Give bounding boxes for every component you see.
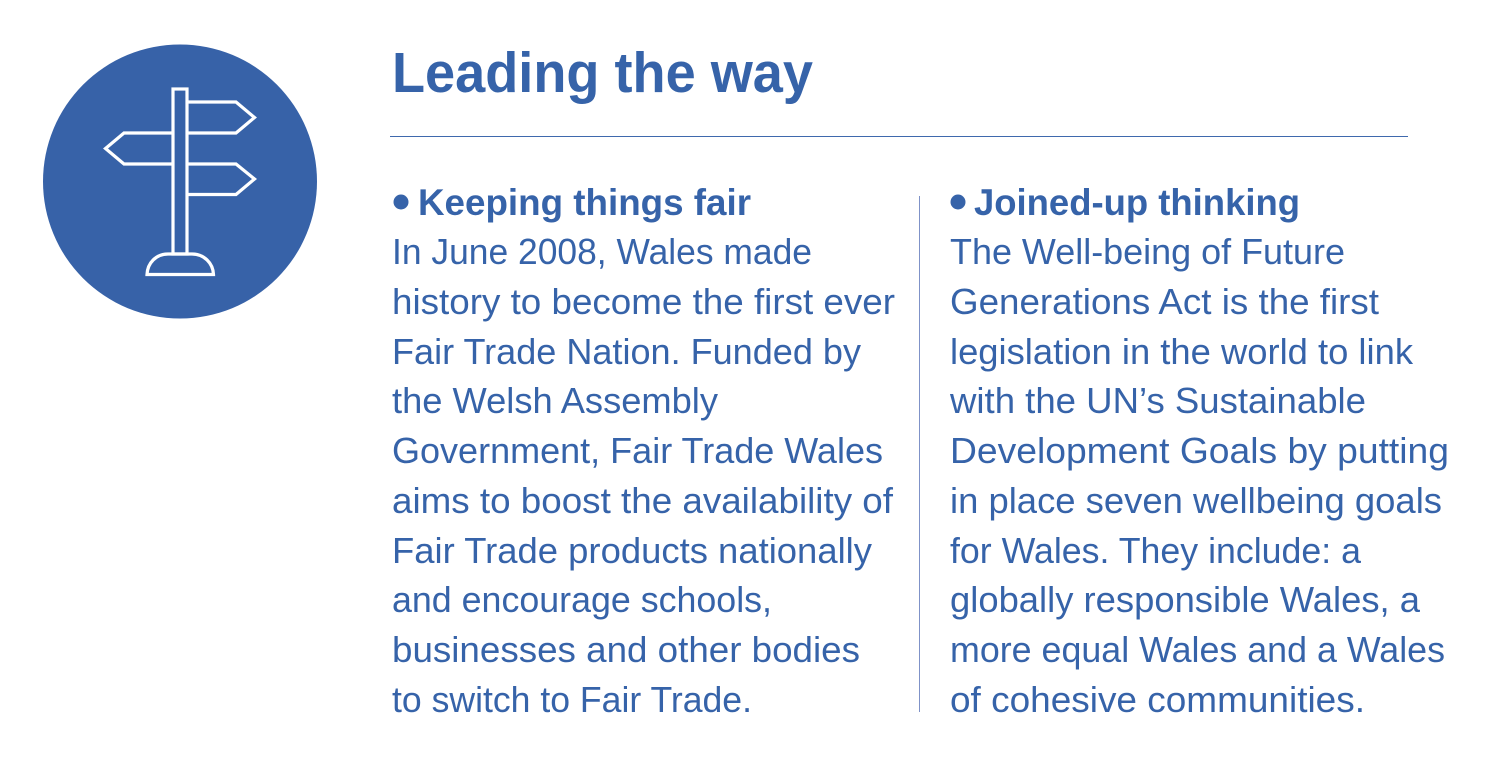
body text: aims to boost the availability of bbox=[392, 480, 894, 521]
body text: legislation in the world to link bbox=[950, 331, 1414, 372]
bullet bbox=[394, 194, 408, 210]
body text: history to become the first ever bbox=[392, 281, 895, 322]
body text: Generations Act is the first bbox=[950, 281, 1379, 322]
body text: Development Goals by putting bbox=[950, 430, 1449, 471]
text column: Keeping things fair bbox=[392, 182, 895, 720]
icon: signpost in blue circle bbox=[43, 44, 317, 318]
body text: more equal Wales and a Wales bbox=[950, 629, 1445, 670]
body text: The Well-being of Future bbox=[950, 231, 1345, 272]
body text: in place seven wellbeing goals bbox=[950, 480, 1442, 521]
body text bbox=[949, 231, 1449, 720]
body text: In June 2008, Wales made bbox=[392, 231, 812, 272]
body text: globally responsible Wales, a bbox=[950, 579, 1421, 620]
title: Leading the way bbox=[392, 41, 813, 105]
body text: with the UN’s Sustainable bbox=[949, 380, 1366, 421]
subheading: Keeping things fair bbox=[418, 182, 751, 223]
body text bbox=[392, 231, 895, 720]
body text: and encourage schools, bbox=[392, 579, 772, 620]
body text: of cohesive communities. bbox=[950, 679, 1365, 720]
body text: businesses and other bodies bbox=[392, 629, 860, 670]
body text: for Wales. They include: a bbox=[950, 530, 1362, 571]
bullet bbox=[950, 194, 966, 210]
body text: to switch to Fair Trade. bbox=[392, 679, 752, 720]
body text: the Welsh Assembly bbox=[392, 380, 719, 421]
body text: Fair Trade Nation. Funded by bbox=[392, 331, 862, 372]
text column: Joined-up thinking bbox=[949, 182, 1449, 720]
body text: Fair Trade products nationally bbox=[392, 530, 873, 571]
body text: Government, Fair Trade Wales bbox=[392, 430, 883, 471]
subheading: Joined-up thinking bbox=[974, 182, 1300, 223]
